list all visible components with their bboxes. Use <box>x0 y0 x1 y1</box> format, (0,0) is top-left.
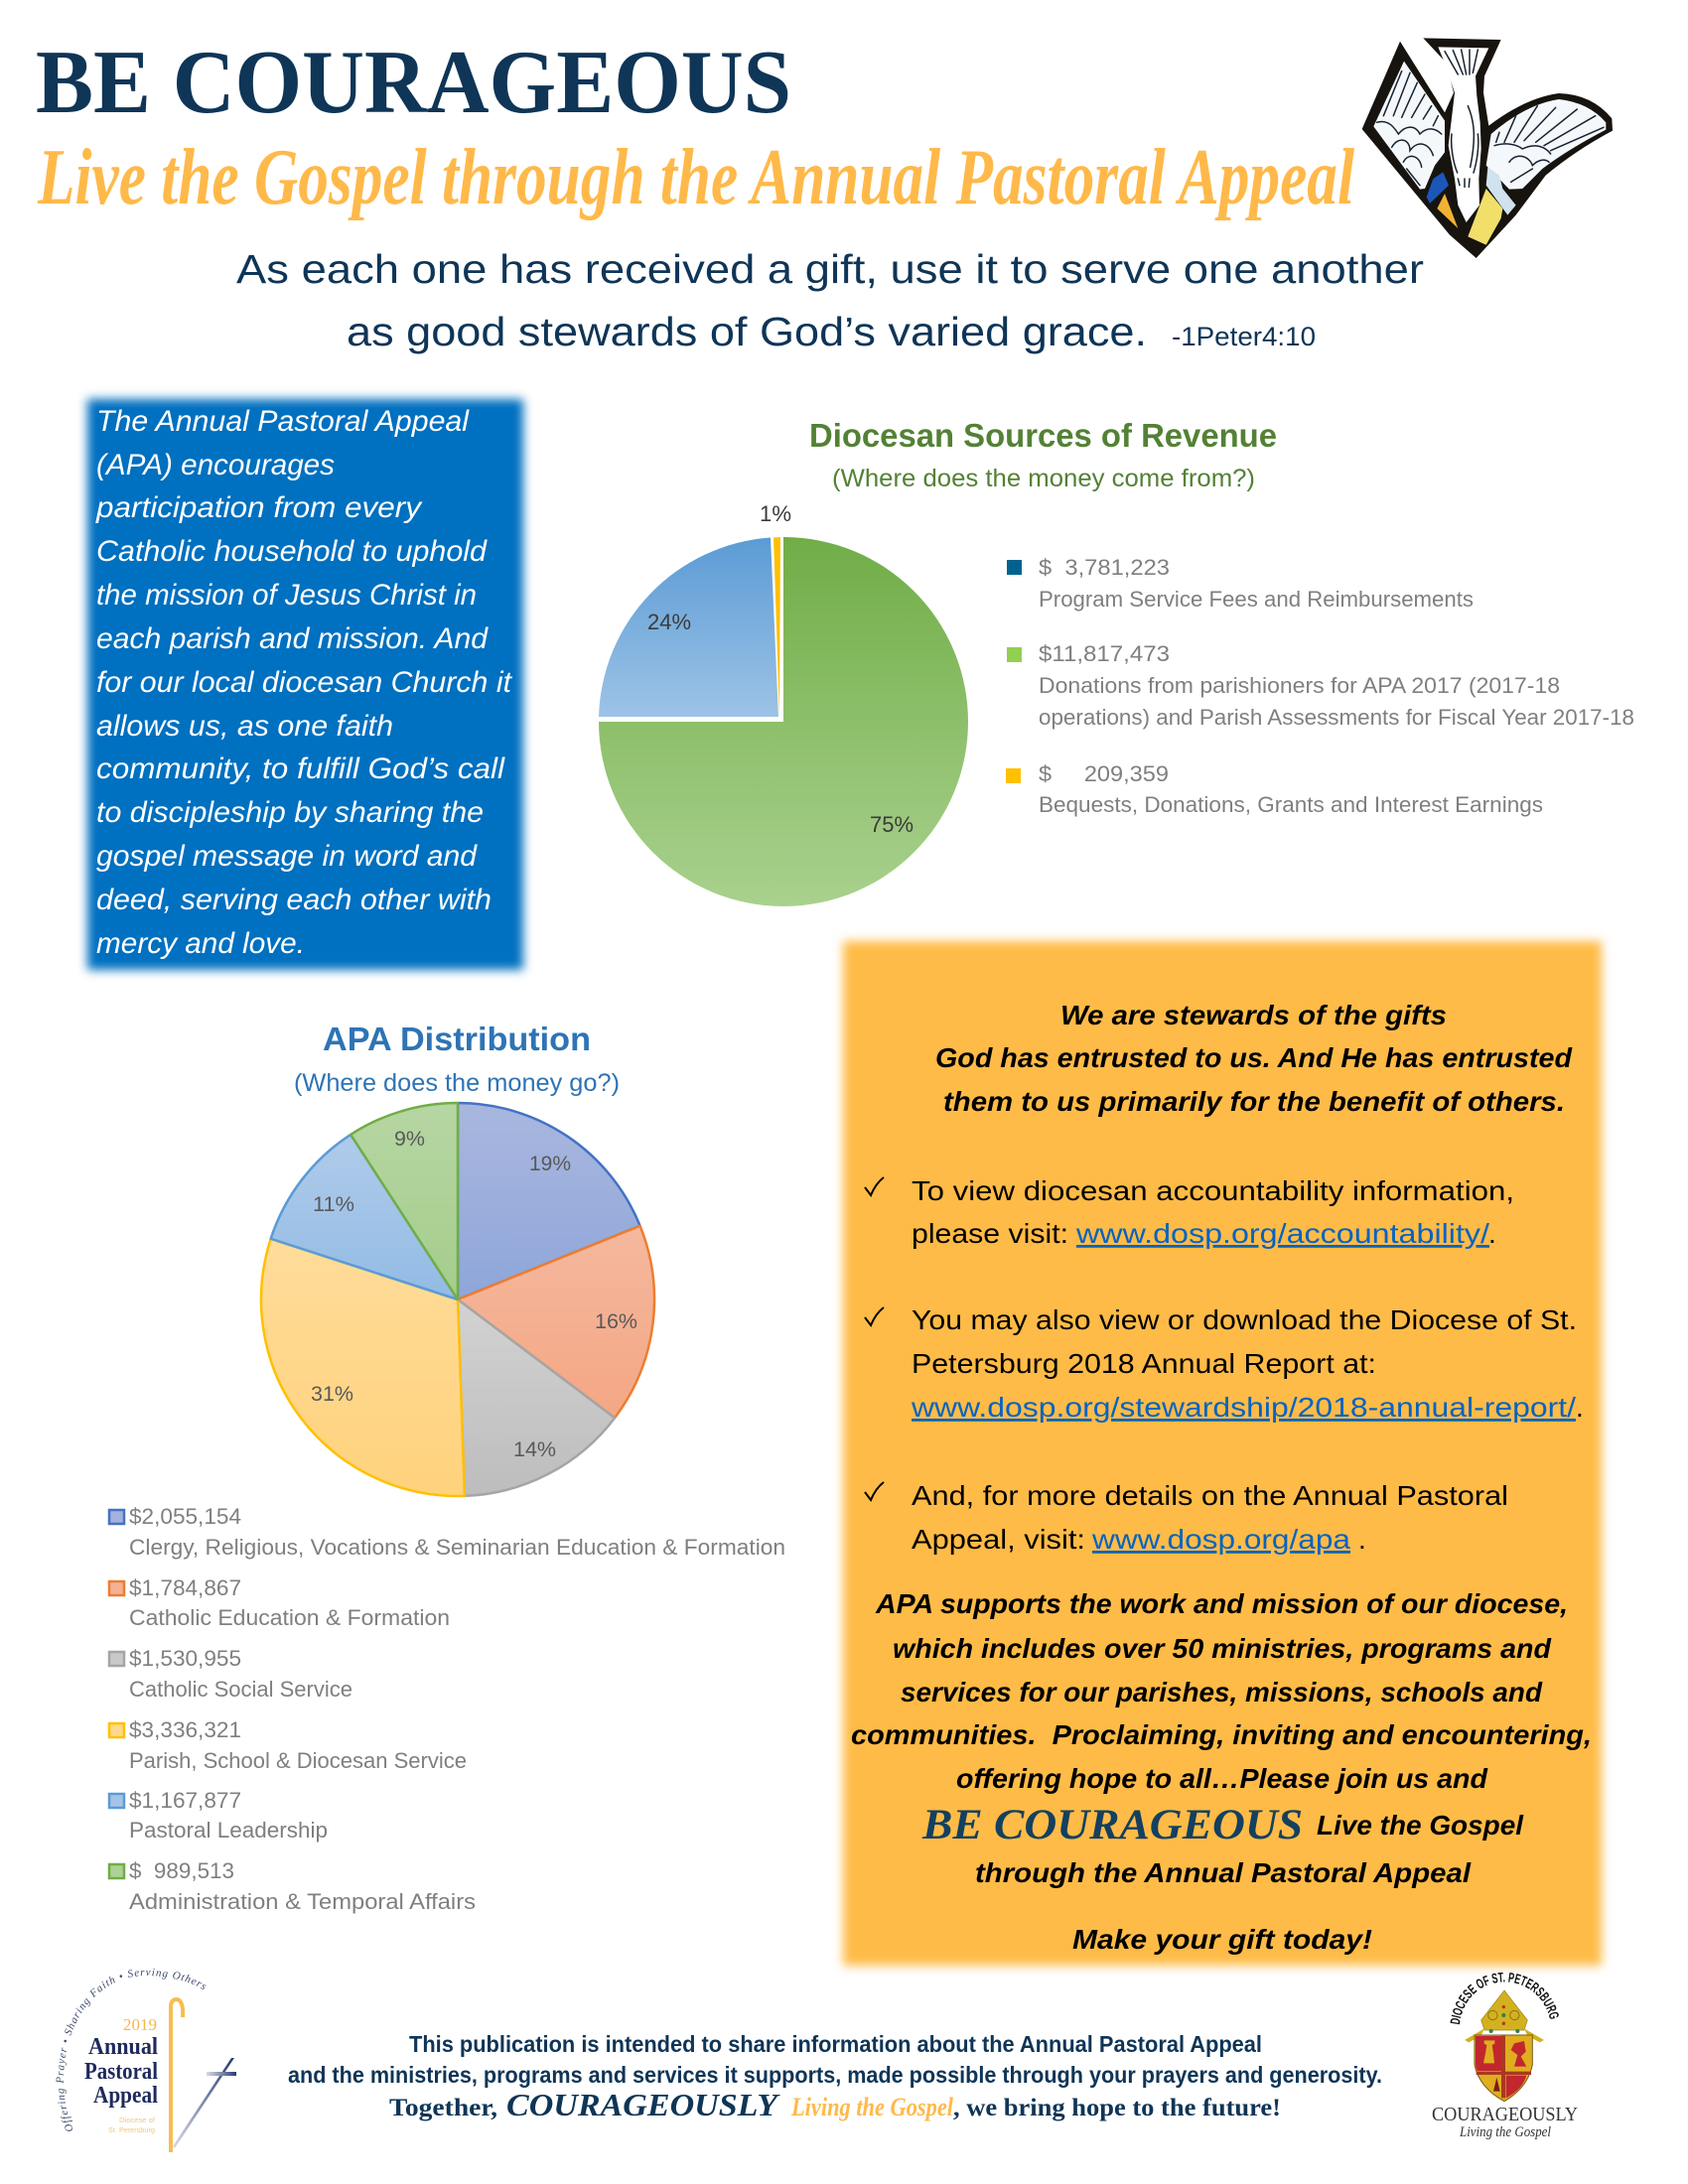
pie chart: distribution <box>261 1103 654 1496</box>
stewardship statement: them to us primarily for the benefit of others. <box>943 1086 1565 1117</box>
logo: 2019 Annual Pastoral Appeal: Pastoral <box>84 2059 158 2085</box>
legend: revenue: operations) and Parish Assessments for Fiscal Year 2017-18 <box>1039 705 1634 730</box>
footer statement: This publication is intended to share information about the Annual Pastoral Appeal <box>409 2031 1262 2057</box>
closing message: services for our parishes, missions, schools and <box>901 1677 1543 1707</box>
legend: distribution: Parish, School & Diocesan Service <box>129 1748 467 1773</box>
legend: distribution <box>109 1504 785 1914</box>
footer statement: COURAGEOUSLY <box>506 2087 780 2122</box>
scripture verse <box>236 246 1424 354</box>
legend: distribution: $3,336,321 <box>129 1717 241 1742</box>
legend: revenue: Program Service Fees and Reimbursements <box>1039 587 1474 612</box>
logo: Diocese of St. Petersburg crest <box>1432 1972 1578 2140</box>
logo: 2019 Annual Pastoral Appeal: Annual <box>88 2034 158 2060</box>
scripture verse: as good stewards of God’s varied grace. <box>347 309 1147 354</box>
pie chart: revenue: 75% <box>870 812 914 837</box>
heading: Diocesan Sources of Revenue: Diocesan Sources of Revenue <box>809 417 1277 454</box>
legend: distribution: $2,055,154 <box>129 1504 241 1529</box>
logo: 2019 Annual Pastoral Appeal: Diocese of <box>119 2117 155 2124</box>
footer statement: and the ministries, programs and services it supports, made possible through your prayers and generosity. <box>288 2062 1382 2088</box>
intro paragraph: to discipleship by sharing the <box>96 796 484 829</box>
APA details item: . <box>1358 1524 1366 1555</box>
logo: 2019 Annual Pastoral Appeal: Offering Prayer • Sharing Faith • Serving Others <box>56 1969 207 2131</box>
legend: revenue: Bequests, Donations, Grants and Interest Earnings <box>1039 792 1543 817</box>
logo: 2019 Annual Pastoral Appeal: Appeal <box>93 2083 158 2109</box>
intro paragraph: each parish and mission. And <box>96 622 490 655</box>
pie chart: revenue <box>599 501 968 906</box>
legend: distribution: Catholic Education & Formation <box>129 1605 450 1630</box>
heading: Diocesan Sources of Revenue: (Where does the money come from?) <box>832 465 1255 492</box>
closing message: communities. Proclaiming, inviting and encountering, <box>851 1719 1592 1750</box>
icon: checkmark 3 <box>865 1482 884 1500</box>
closing message: Live the Gospel <box>1317 1810 1524 1841</box>
icon: stained-glass dove <box>1362 38 1613 258</box>
panel: stewardship call to action <box>843 941 1602 1966</box>
closing message: APA supports the work and mission of our diocese, <box>875 1588 1568 1619</box>
intro paragraph <box>95 405 513 960</box>
APA details item: www.dosp.org/apa <box>1091 1524 1350 1555</box>
scripture verse: As each one has received a gift, use it to serve one another <box>236 246 1424 292</box>
APA details item: And, for more details on the Annual Pastoral <box>912 1480 1508 1511</box>
legend: distribution: $ 989,513 <box>129 1858 234 1883</box>
accountability item <box>912 1175 1514 1249</box>
intro paragraph: participation from every <box>95 491 423 524</box>
logo: 2019 Annual Pastoral Appeal: 2019 <box>123 2015 157 2034</box>
stewardship statement: We are stewards of the gifts <box>1060 1000 1447 1030</box>
legend: revenue: $ 3,781,223 <box>1039 555 1170 580</box>
icon: checkmark 2 <box>865 1307 884 1325</box>
legend: distribution: Catholic Social Service <box>129 1677 352 1702</box>
closing message: offering hope to all…Please join us and <box>956 1763 1488 1794</box>
APA details item: Appeal, visit: <box>912 1524 1085 1555</box>
stewardship statement: God has entrusted to us. And He has entrusted <box>935 1042 1573 1073</box>
stewardship statement <box>935 1000 1573 1117</box>
legend: distribution: Pastoral Leadership <box>129 1818 328 1843</box>
intro paragraph: The Annual Pastoral Appeal <box>96 405 470 438</box>
closing message: Make your gift today! <box>1072 1924 1372 1955</box>
legend: distribution: $1,530,955 <box>129 1646 241 1671</box>
heading: Diocesan Sources of Revenue <box>809 417 1277 492</box>
legend: revenue: $ 209,359 <box>1039 761 1169 786</box>
pie chart: distribution: 19% <box>529 1153 571 1175</box>
legend: distribution: Administration & Temporal Affairs <box>129 1889 476 1914</box>
APA details item <box>912 1480 1508 1555</box>
logo: 2019 Annual Pastoral Appeal: St. Petersburg <box>108 2127 155 2134</box>
logo: Diocese of St. Petersburg crest: Living the Gospel <box>1459 2124 1551 2140</box>
legend: revenue: Donations from parishioners for APA 2017 (2017-18 <box>1039 673 1560 698</box>
pie chart: distribution: 16% <box>595 1310 637 1333</box>
pie chart: revenue: 24% <box>647 610 691 634</box>
intro paragraph: the mission of Jesus Christ in <box>96 579 477 612</box>
pie chart: distribution: 31% <box>311 1383 353 1406</box>
annual report item: Petersburg 2018 Annual Report at: <box>912 1348 1376 1379</box>
title: BE COURAGEOUS <box>36 32 791 132</box>
icon: checkmark 1 <box>865 1177 884 1195</box>
accountability item: www.dosp.org/accountability/ <box>1075 1218 1489 1249</box>
annual report item <box>911 1304 1584 1423</box>
accountability item: please visit: <box>912 1218 1068 1249</box>
intro paragraph: gospel message in word and <box>96 840 479 873</box>
pie chart: distribution: 9% <box>394 1128 425 1151</box>
heading: APA Distribution: (Where does the money go?) <box>294 1069 620 1097</box>
accountability item: To view diocesan accountability information, <box>912 1175 1514 1206</box>
intro paragraph: Catholic household to uphold <box>96 535 489 568</box>
annual report item: You may also view or download the Diocese of St. <box>912 1304 1577 1335</box>
intro paragraph: for our local diocesan Church it <box>96 666 513 699</box>
intro paragraph: deed, serving each other with <box>96 884 492 916</box>
legend: revenue: $11,817,473 <box>1039 641 1170 666</box>
legend: distribution: $1,784,867 <box>129 1575 241 1600</box>
closing message: which includes over 50 ministries, programs and <box>893 1633 1552 1664</box>
legend: distribution: $1,167,877 <box>129 1788 241 1813</box>
intro paragraph: community, to fulfill God’s call <box>96 752 506 785</box>
intro paragraph: allows us, as one faith <box>96 710 393 743</box>
heading: APA Distribution <box>294 1021 620 1097</box>
legend: revenue <box>1006 555 1634 817</box>
panel: blue APA intro <box>87 399 523 970</box>
pie chart: revenue: 1% <box>760 501 791 526</box>
logo: Diocese of St. Petersburg crest: DIOCESE OF ST. PETERSBURG <box>1450 1972 1559 2025</box>
accountability item: . <box>1488 1218 1496 1249</box>
legend: distribution: Clergy, Religious, Vocations & Seminarian Education & Formation <box>129 1535 785 1560</box>
footer statement: , we bring hope to the future! <box>953 2095 1281 2121</box>
footer statement: Together, <box>389 2095 497 2121</box>
scripture verse: -1Peter4:10 <box>1172 322 1316 351</box>
pie chart: distribution: 14% <box>513 1438 556 1461</box>
annual report item: . <box>1576 1392 1584 1423</box>
annual report item: www.dosp.org/stewardship/2018-annual-report/ <box>911 1392 1576 1423</box>
intro paragraph: mercy and love. <box>96 927 305 960</box>
closing message: through the Annual Pastoral Appeal <box>975 1857 1472 1888</box>
intro paragraph: (APA) encourages <box>96 449 335 481</box>
pie chart: distribution: 11% <box>313 1193 354 1216</box>
heading: APA Distribution: APA Distribution <box>323 1021 591 1057</box>
closing message <box>851 1588 1592 1955</box>
closing message: BE COURAGEOUS <box>921 1802 1303 1848</box>
footer statement <box>288 2031 1382 2122</box>
logo: Diocese of St. Petersburg crest: COURAGEOUSLY <box>1432 2104 1578 2125</box>
footer statement: Living the Gospel <box>790 2093 954 2121</box>
